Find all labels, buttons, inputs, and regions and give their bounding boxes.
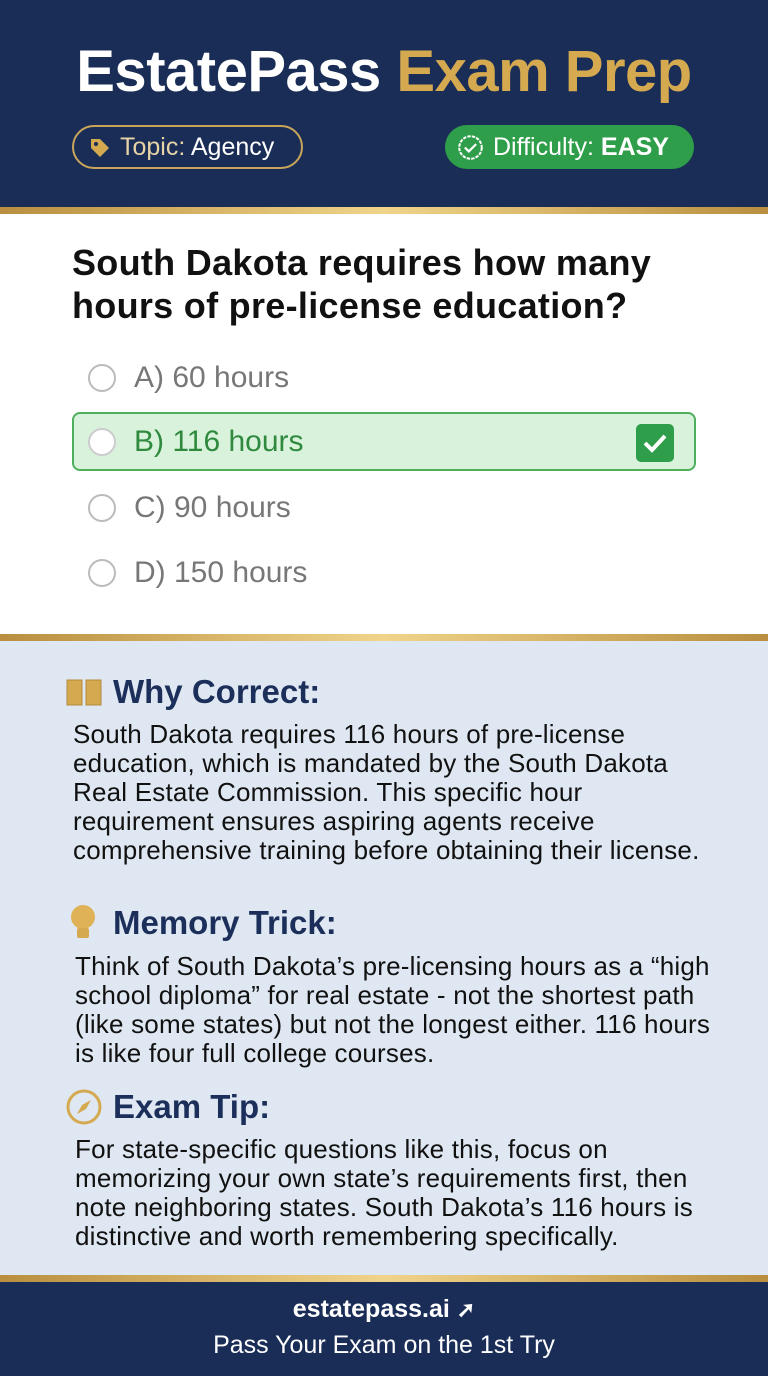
option B correct: B) 116 hours [134,424,304,458]
heading: memory trick: Memory Trick: [113,904,337,941]
icon: check seal [458,135,483,160]
text: memory trick: (like some states) but not the longest either. 116 hours [75,1009,710,1039]
text: why correct: requirement ensures aspiring agents receive [73,806,595,836]
option B correct [72,412,696,471]
topic badge [72,125,303,169]
text: exam tip: note neighboring states. South Dakota’s 116 hours is [75,1192,693,1222]
explanation panel [0,641,768,1275]
icon: book [66,680,102,706]
icon: bulb [71,905,95,938]
icon: tag [91,139,109,157]
text: why correct: South Dakota requires 116 hours of pre-license [73,719,625,749]
text: why correct: Real Estate Commission. This specific hour [73,777,582,807]
icon: checkmark [636,424,674,462]
text: memory trick: Think of South Dakota’s pre-licensing hours as a “high [75,951,710,981]
text: exam tip: distinctive and worth remembering specifically. [75,1221,619,1251]
text: exam tip: memorizing your own state’s requirements first, then [75,1163,688,1193]
text: why correct [73,719,700,865]
text: memory trick: school diploma” for real estate - not the shortest path [75,980,694,1010]
topic badge: Topic: Agency [120,133,274,161]
difficulty badge [445,125,694,169]
option A: A) 60 hours [134,360,289,394]
heading: why correct: Why Correct: [113,673,320,710]
text: why correct: comprehensive training before obtaining their license. [73,835,700,865]
difficulty badge: Difficulty: EASY [493,133,669,161]
text: exam tip [75,1134,693,1251]
text: memory trick: is like four full college courses. [75,1038,434,1068]
text: memory trick [75,951,710,1068]
option D: D) 150 hours [134,556,307,588]
text: why correct: education, which is mandated by the South Dakota [73,748,668,778]
icon: compass [66,1090,102,1124]
title: EstatePass Exam Prep [76,39,692,104]
heading: exam tip: Exam Tip: [113,1088,270,1125]
question [72,242,651,326]
footer [0,1282,768,1376]
option C: C) 90 hours [134,490,291,524]
text: exam tip: For state-specific questions like this, focus on [75,1134,608,1164]
question panel [0,214,768,634]
footer url: estatepass.ai ➚ [293,1295,475,1323]
question: hours of pre-license education? [72,285,627,326]
footer tagline: Pass Your Exam on the 1st Try [213,1331,555,1359]
header [0,0,768,207]
question: South Dakota requires how many [72,242,651,283]
